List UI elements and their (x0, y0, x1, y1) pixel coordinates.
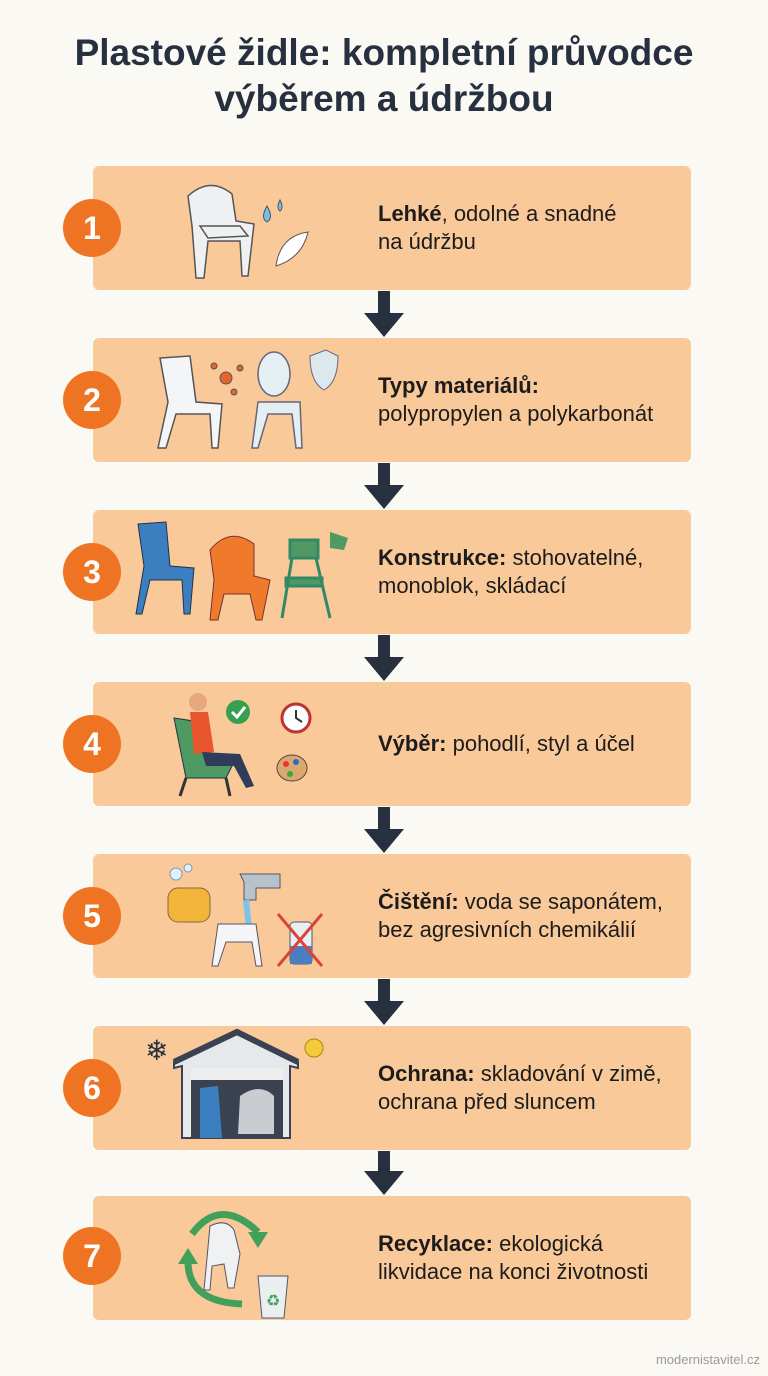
text 6 (378, 1061, 662, 1114)
icon: sponge, tap, chair, crossed bottle (168, 864, 323, 967)
title: Plastové židle: kompletní průvodce (75, 32, 693, 73)
panel 5 (93, 854, 691, 978)
badge 3: 3 (83, 554, 101, 590)
badge 4 (63, 715, 121, 773)
text 1 (378, 201, 617, 254)
icon: chair, drops, feather (187, 184, 309, 279)
arrow 5 (364, 979, 404, 1025)
text 6: Ochrana: skladování v zimě, (378, 1061, 662, 1086)
text 5: Čištění: voda se saponátem, (378, 889, 663, 914)
panel 6 (93, 1026, 691, 1150)
arrow 6 (364, 1151, 404, 1195)
text 7: likvidace na konci životnosti (378, 1259, 648, 1284)
arrow 3 (364, 635, 404, 681)
text 7 (378, 1231, 648, 1284)
text 2: polypropylen a polykarbonát (378, 401, 653, 426)
text 4: Výběr: pohodlí, styl a účel (378, 731, 635, 756)
text 1: Lehké, odolné a snadné (378, 201, 617, 226)
text 3: Konstrukce: stohovatelné, (378, 545, 643, 570)
badge 1 (63, 199, 121, 257)
icon: garage with snowflake and sun (145, 1028, 324, 1139)
text 3: monoblok, skládací (378, 573, 566, 598)
text 7: Recyklace: ekologická (378, 1231, 603, 1256)
footer: modernistavitel.cz (656, 1352, 760, 1367)
badge 2: 2 (83, 382, 101, 418)
arrow 1 (364, 291, 404, 337)
text 5 (378, 888, 663, 942)
title (75, 32, 693, 119)
badge 6 (63, 1059, 121, 1117)
badge 6: 6 (83, 1070, 101, 1106)
icon: recycling arrows, chair, bin (178, 1211, 288, 1318)
badge 5: 5 (83, 898, 101, 934)
arrow 4 (364, 807, 404, 853)
badge 3 (63, 543, 121, 601)
panel 4 (93, 682, 691, 806)
badge 7 (63, 1227, 121, 1285)
icon: garage with snowflake and sun: ❄ (145, 1035, 168, 1066)
panel 3 (93, 510, 691, 634)
text 5: bez agresivních chemikálií (378, 917, 636, 942)
text 6: ochrana před sluncem (378, 1089, 596, 1114)
text 2: Typy materiálů: (378, 373, 539, 398)
arrow 2 (364, 463, 404, 509)
title: výběrem a údržbou (214, 78, 554, 119)
panel 2 (93, 338, 691, 462)
badge 7: 7 (83, 1238, 101, 1274)
icon: seated person, check, clock, palette (173, 693, 312, 796)
icon: recycling arrows, chair, bin: ♻ (266, 1293, 280, 1310)
text 1: na údržbu (378, 229, 476, 254)
panel 1 (93, 166, 691, 290)
icon: two chairs, molecule, shield (157, 350, 338, 449)
text 2 (378, 373, 654, 426)
text 3 (378, 545, 643, 598)
badge 2 (63, 371, 121, 429)
icon: stacked, monoblock, folding chairs (135, 522, 348, 620)
badge 1: 1 (83, 210, 101, 246)
panel 7 (93, 1196, 691, 1320)
badge 4: 4 (83, 726, 101, 762)
badge 5 (63, 887, 121, 945)
